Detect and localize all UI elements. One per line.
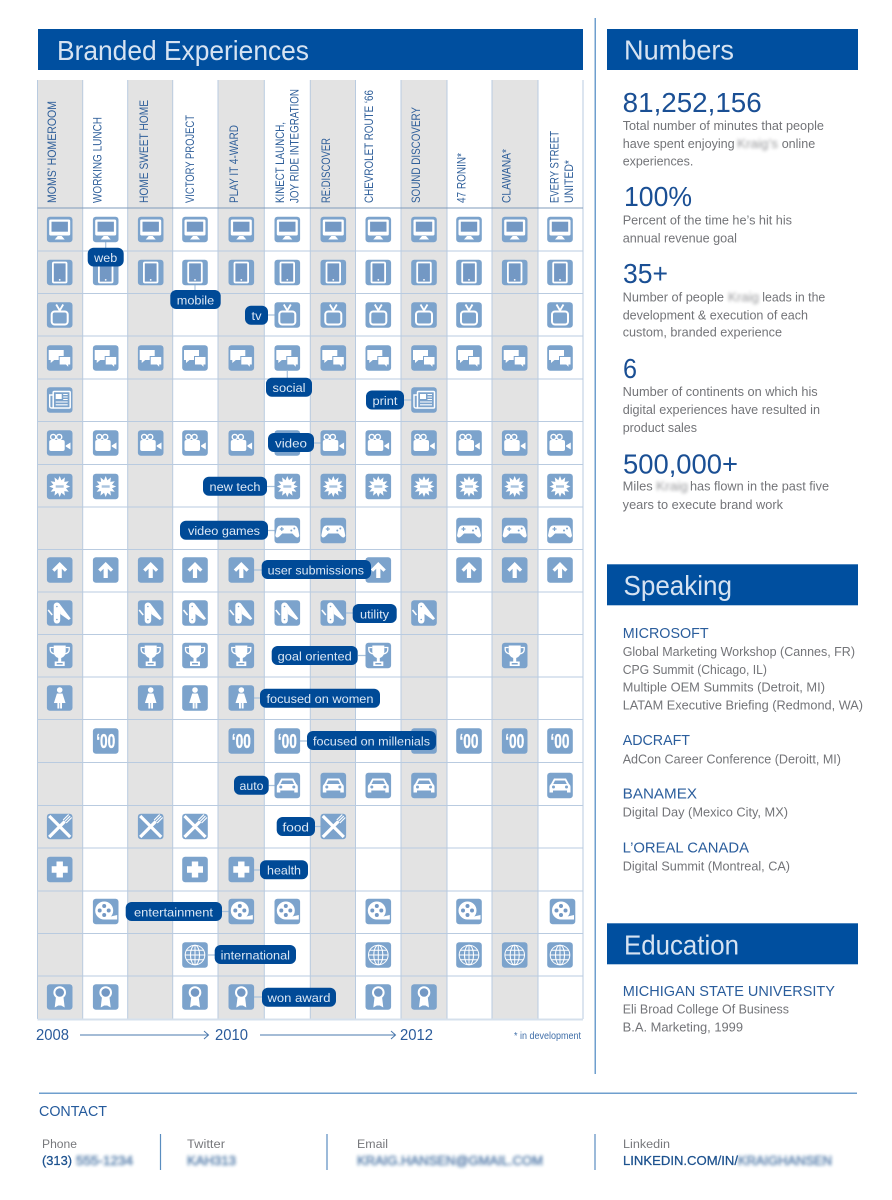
panel: education (607, 923, 858, 1034)
callout: new tech (203, 477, 267, 496)
contact: linkedin: LINKEDIN.COM/IN/ (623, 1154, 739, 1168)
entry: Microsoft: Global Marketing Workshop (Cannes, FR) (623, 645, 855, 659)
icons: user submissions (47, 557, 573, 583)
callout: print: print (372, 394, 398, 408)
entry: Michigan State University: MICHIGAN STATE UNIVERSITY (623, 984, 835, 1000)
icons: focused on millenials: ‘00 (550, 731, 570, 753)
icons: won award (47, 984, 437, 1010)
heading: Speaking (607, 564, 858, 605)
callout: focused on women: focused on women (266, 692, 374, 706)
panel: speaking (607, 564, 863, 874)
callout: user submissions: user submissions (268, 563, 364, 577)
icons: health (47, 857, 254, 882)
heading: Branded Experiences (38, 29, 583, 70)
stat: minutes: experiences. (623, 155, 693, 169)
entry: AdCraft: ADCRAFT (623, 733, 690, 749)
stat: continents: Number of continents on which his (623, 385, 818, 399)
column titles: CLAWANA* (502, 149, 514, 203)
callout: focused on women (260, 689, 380, 708)
stat: people: custom, branded experience (623, 326, 782, 340)
callout: entertainment: entertainment (134, 905, 214, 919)
stat: revenue goal (623, 181, 792, 245)
stat: continents: product sales (623, 421, 697, 435)
heading: contact: CONTACT (39, 1104, 107, 1120)
callout: food: food (282, 820, 309, 834)
column titles: KINECT LAUNCH, (275, 122, 287, 203)
callout: goal oriented: goal oriented (278, 649, 352, 663)
contact: twitter: Twitter (187, 1137, 225, 1151)
entry: L'Oreal Canada: Digital Summit (Montreal, CA) (623, 860, 790, 874)
icons: auto (274, 773, 573, 798)
callout: web: web (93, 251, 117, 265)
entry: Microsoft: Multiple OEM Summits (Detroit, MI) (623, 681, 825, 695)
entry: Microsoft (623, 626, 863, 712)
contact: email: KRAIG.HANSEN@GMAIL.COM (357, 1154, 543, 1168)
icons: focused on millenials (93, 728, 573, 754)
stat: people: leads in the (762, 291, 825, 305)
heading: Branded Experiences: Branded Experiences (57, 35, 309, 66)
callout: auto (234, 776, 269, 795)
heading: Education (607, 923, 858, 964)
stat: miles: has flown in the past five (690, 480, 829, 494)
icons: video games (274, 518, 573, 543)
stat: revenue goal: 100% (624, 181, 692, 212)
icons: focused on millenials: ‘00 (96, 731, 115, 753)
entry: Banamex (623, 787, 788, 820)
entry: AdCraft: AdCon Career Conference (Deroitt, MI) (623, 752, 841, 766)
icons: web (47, 217, 573, 242)
column titles: VICTORY PROJECT (185, 115, 197, 203)
stat: miles: 500,000+ (623, 448, 738, 479)
callout: video games: video games (188, 524, 260, 538)
entry: Microsoft: CPG Summit (Chicago, IL) (623, 663, 767, 677)
callout: health: health (267, 864, 301, 878)
column titles: 47 RONIN* (457, 153, 469, 203)
contact: linkedin (623, 1137, 832, 1168)
icons: focused on millenials: ‘00 (505, 731, 524, 753)
heading: Numbers: Numbers (624, 34, 734, 66)
icons: print (47, 387, 437, 413)
contact: linkedin: Linkedin (623, 1137, 670, 1151)
stat: minutes: have spent enjoying (623, 137, 735, 151)
stat: continents (623, 353, 820, 435)
icons: mobile (47, 260, 573, 285)
callout: print (366, 390, 404, 410)
stat: miles: years to execute brand work (623, 498, 784, 512)
vertical divider between columns (594, 18, 596, 1074)
callout: health (260, 860, 308, 879)
icons: social (47, 345, 573, 371)
callout: won award: won award (266, 991, 331, 1005)
stat: people: 35+ (623, 258, 668, 289)
icons: goal oriented (47, 643, 528, 668)
entry: Microsoft: LATAM Executive Briefing (Redmond, WA) (623, 698, 863, 712)
icons: video (47, 430, 573, 456)
callout: utility (353, 604, 397, 623)
column titles: HOME SWEET HOME (139, 100, 151, 203)
icons: focused on women (47, 685, 254, 711)
stat: miles (623, 448, 829, 512)
contact: phone: (313) (42, 1154, 72, 1168)
chart grid background (38, 80, 583, 1020)
entry: L'Oreal Canada: L’OREAL CANADA (623, 841, 749, 857)
panel: contact (39, 1092, 857, 1170)
column titles: MOMS’ HOMEROOM (47, 101, 59, 203)
callout: social: social (272, 381, 306, 395)
entry: Michigan State University (623, 984, 835, 1034)
column titles: RE:DISCOVER (321, 138, 333, 203)
callout: tv: tv (252, 309, 262, 323)
callout: mobile: mobile (177, 293, 214, 307)
icons: new tech (47, 474, 573, 499)
contact: email: Email (357, 1137, 388, 1151)
panel: branded experiences (36, 29, 583, 1044)
stat: people: Number of people (623, 291, 724, 305)
entry: Michigan State University: Eli Broad College Of Business (623, 1003, 789, 1017)
callout labels (88, 248, 436, 1007)
connector lines from callouts to icons (106, 242, 412, 997)
callout: international: international (221, 948, 290, 962)
callout: goal oriented (272, 646, 358, 665)
entry: Banamex: BANAMEX (623, 787, 697, 803)
stat: minutes: Total number of minutes that people (623, 119, 824, 133)
entry: L'Oreal Canada (623, 841, 790, 874)
stat: continents: digital experiences have resulted in (623, 403, 820, 417)
entry: Microsoft: MICROSOFT (623, 626, 709, 642)
stat: revenue goal: annual revenue goal (623, 231, 737, 245)
callout: won award (262, 988, 336, 1007)
icons: tv (47, 302, 573, 328)
callout: social (266, 378, 312, 397)
column titles: JOY RIDE INTEGRATION (290, 89, 302, 203)
column titles: EVERY STREET (550, 131, 562, 203)
timeline (36, 1027, 581, 1044)
stat: miles: Kraig (656, 480, 688, 494)
contact: linkedin: KRAIGHANSEN (738, 1154, 832, 1168)
stat: continents: 6 (623, 353, 637, 384)
icon matrix (47, 217, 575, 1010)
stat: people: Kraig (728, 291, 759, 305)
heading: Numbers (607, 29, 858, 70)
callout: video games (180, 521, 268, 540)
contact: phone (42, 1137, 133, 1168)
panel: numbers (607, 29, 858, 512)
contact: phone: 555-1234 (76, 1154, 133, 1168)
timeline: * in development (514, 1031, 581, 1042)
icons: focused on millenials: ‘00 (278, 731, 297, 753)
stat: minutes: online (782, 137, 815, 151)
stat: miles: Miles (623, 480, 653, 494)
callout: entertainment (126, 902, 222, 921)
icons: focused on millenials: ‘00 (460, 731, 478, 753)
heading: Education: Education (624, 929, 739, 960)
icons: international (182, 942, 573, 968)
stat: minutes: Kraig’s (737, 137, 778, 151)
entry: Banamex: Digital Day (Mexico City, MX) (623, 806, 788, 820)
timeline: 2010 (215, 1027, 248, 1044)
icons: food (47, 814, 346, 839)
callout: focused on millenials (307, 731, 436, 750)
column titles: PLAY IT 4-WARD (229, 125, 241, 203)
callout: video (268, 433, 314, 452)
icons: entertainment (93, 899, 575, 924)
stat: people: development & execution of each (623, 308, 808, 322)
heading: Speaking: Speaking (624, 570, 732, 601)
callout: international (215, 945, 296, 964)
callout: utility: utility (360, 607, 390, 621)
callout: user submissions (262, 560, 371, 579)
callout: web (88, 248, 124, 266)
timeline: 2008 (36, 1027, 69, 1044)
callout: tv (245, 306, 268, 325)
callout: video: video (275, 436, 307, 450)
contact: twitter: KAH313 (187, 1154, 236, 1168)
column titles (47, 89, 576, 203)
callout: auto: auto (240, 779, 264, 793)
stat: revenue goal: Percent of the time he’s hit his (623, 213, 792, 227)
entry: Michigan State University: B.A. Marketing, 1999 (623, 1020, 743, 1034)
icons: focused on millenials: ‘00 (232, 731, 251, 753)
callout: mobile (170, 290, 221, 309)
column titles: CHEVROLET ROUTE ‘66 (364, 90, 376, 203)
stat: people (623, 258, 825, 340)
column titles: WORKING LUNCH (93, 117, 105, 203)
icons: utility (47, 600, 437, 626)
timeline: 2012 (400, 1027, 433, 1044)
entry: AdCraft (623, 733, 841, 766)
stat: minutes (623, 87, 824, 169)
column titles: UNITED* (564, 160, 576, 203)
callout: focused on millenials: focused on millenials (313, 734, 430, 748)
callout: new tech: new tech (210, 480, 261, 494)
stat: minutes: 81,252,156 (623, 87, 762, 118)
contact: email (357, 1137, 543, 1168)
contact: twitter (187, 1137, 236, 1168)
callout: food (277, 817, 315, 836)
column titles: SOUND DISCOVERY (411, 107, 423, 203)
contact: phone: Phone (42, 1137, 77, 1151)
